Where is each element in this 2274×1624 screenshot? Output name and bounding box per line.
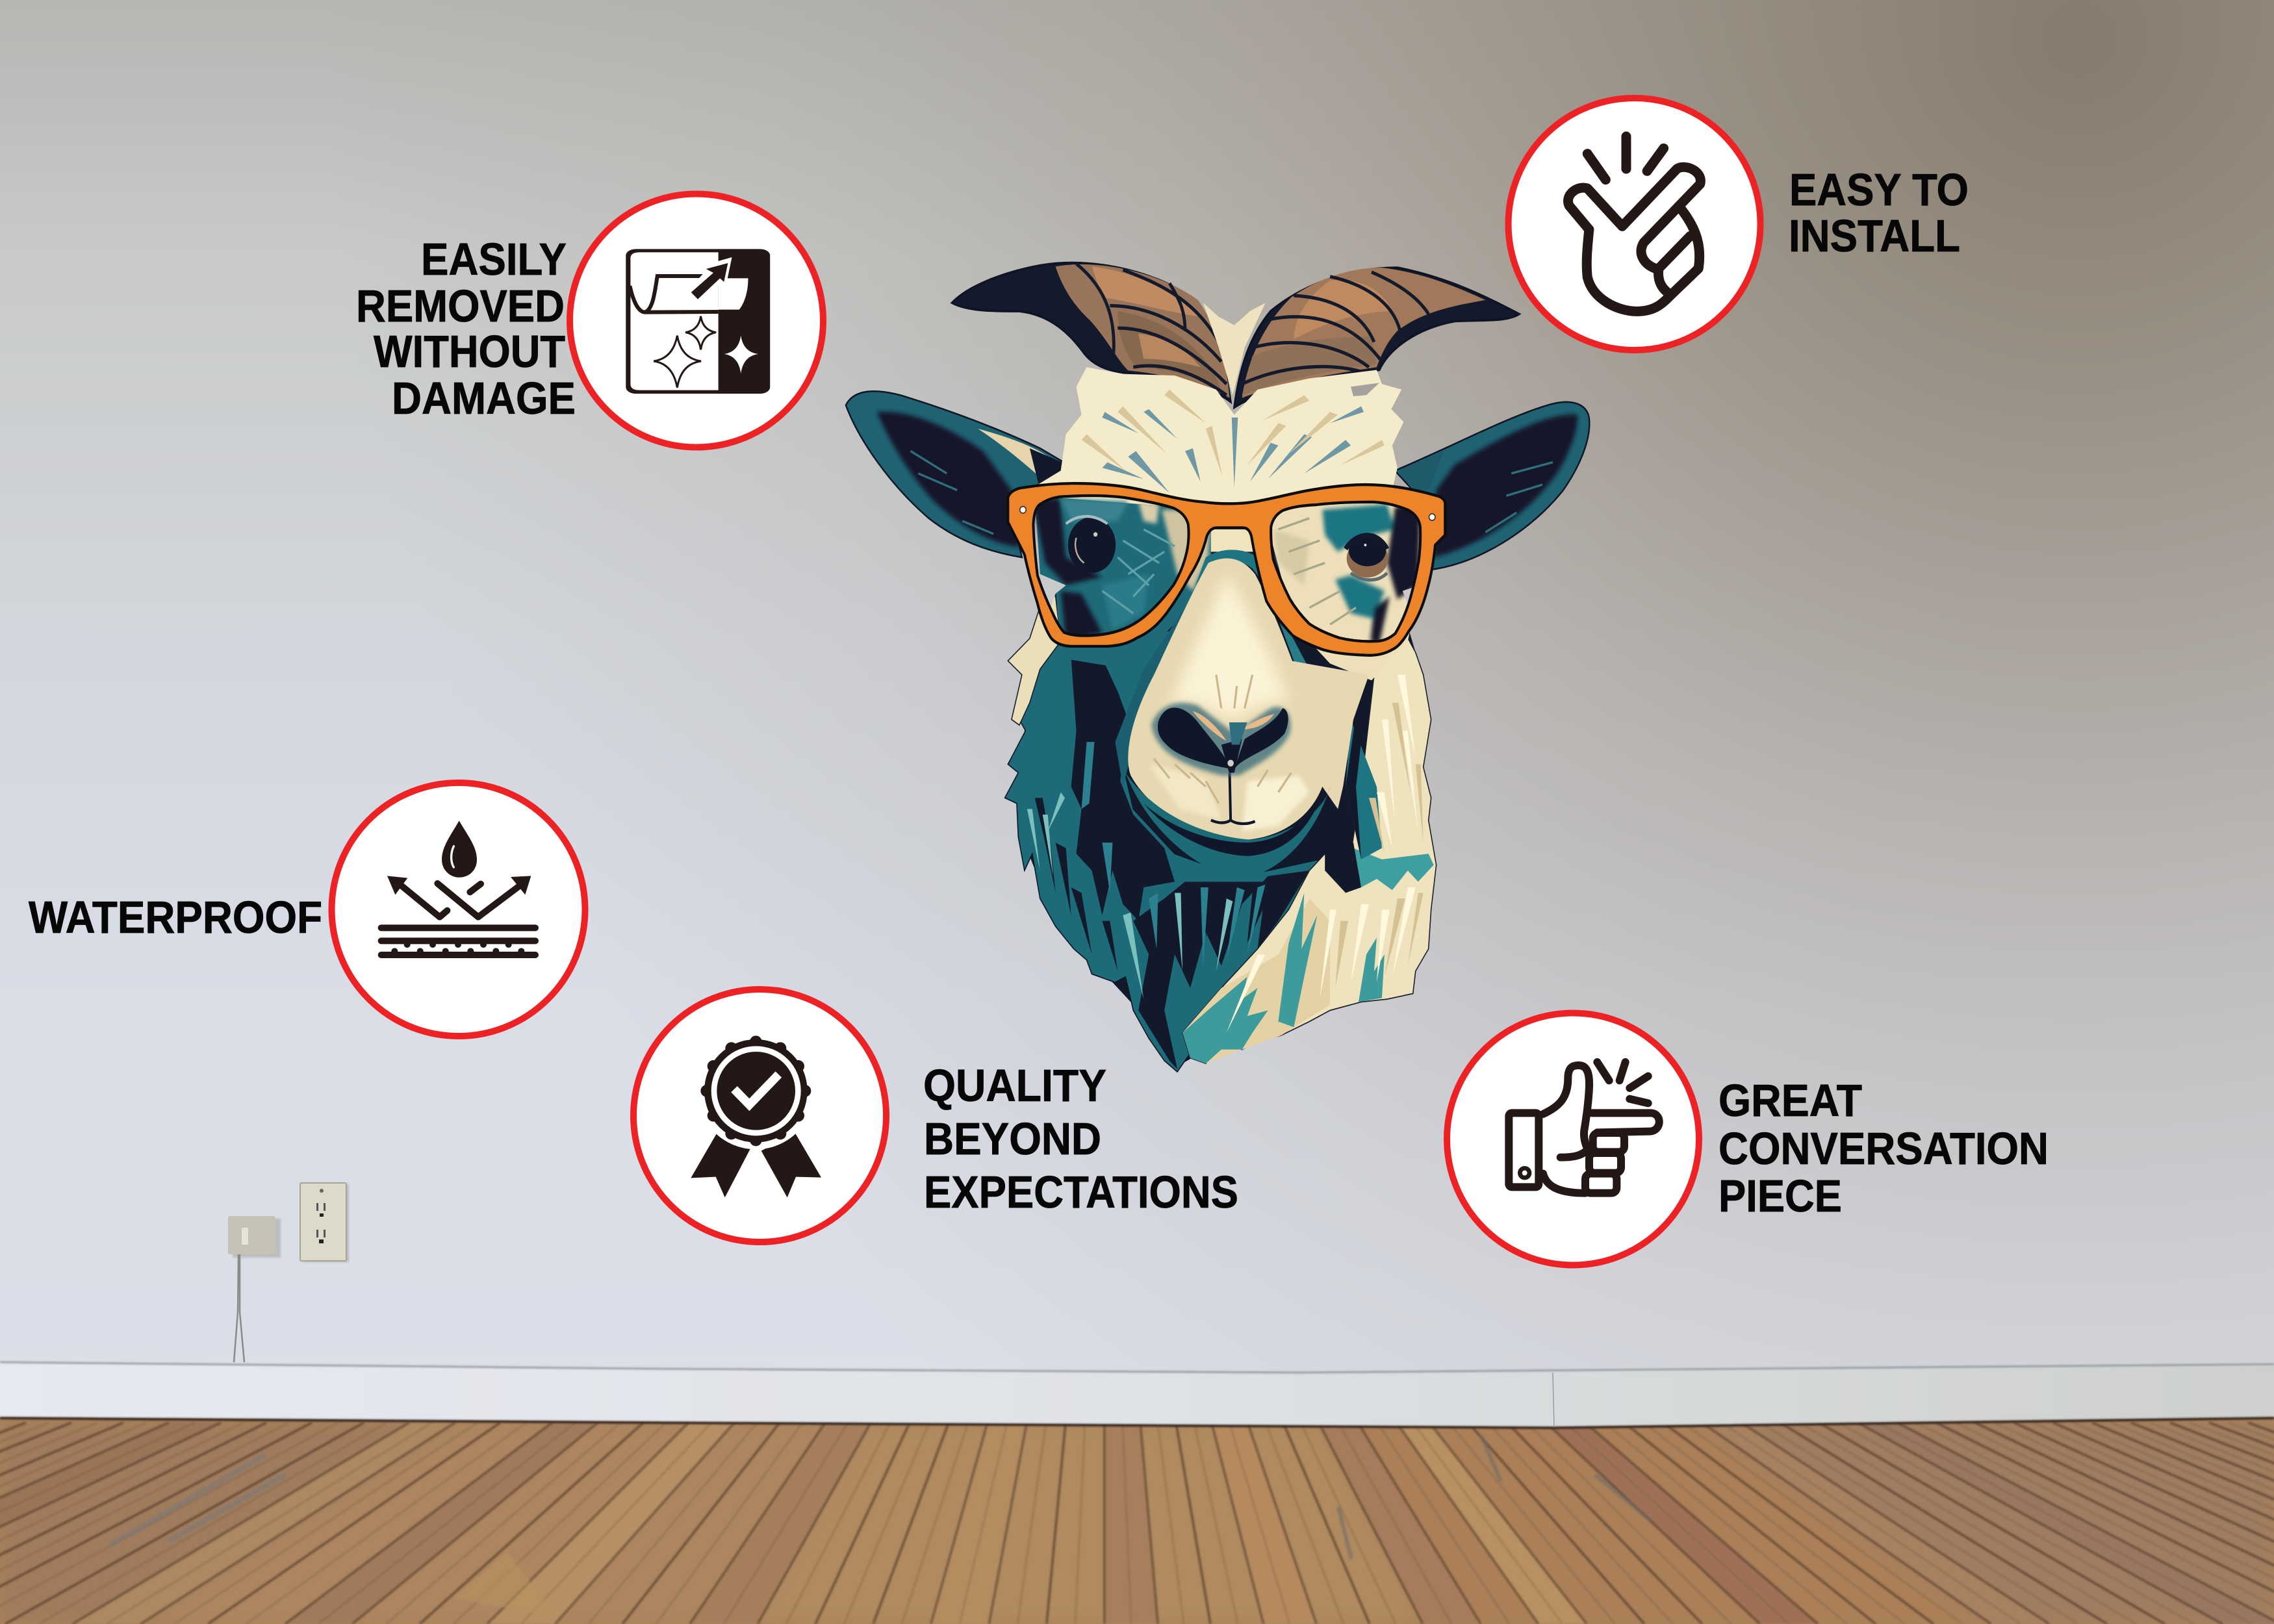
left horn [952, 262, 1231, 402]
label text: CONVERSATION [1718, 1123, 2049, 1174]
icon: award rosette [691, 1035, 821, 1198]
label text: DAMAGE [392, 373, 576, 424]
hair tuft between horns [1203, 303, 1266, 395]
head underlay [1022, 496, 1426, 1066]
label text: EASY TO [1789, 164, 1969, 215]
feature: easily removed without damage [356, 194, 823, 447]
label text: EXPECTATIONS [924, 1167, 1238, 1217]
eyes [1066, 516, 1388, 580]
badge circle [1509, 98, 1761, 350]
label text: PIECE [1718, 1171, 1842, 1221]
orange glasses [1008, 483, 1445, 655]
badge circle [331, 783, 585, 1036]
label text: WATERPROOF [29, 892, 322, 943]
label text: WITHOUT [374, 326, 565, 377]
label text: INSTALL [1789, 210, 1960, 261]
face behind lenses [1032, 496, 1421, 680]
icon: pointing thumbs-up hand [1505, 1058, 1663, 1197]
baseboard [0, 1362, 2274, 1428]
label text [923, 1060, 1238, 1217]
label text [1718, 1075, 2049, 1221]
wall switch and cord [228, 1216, 281, 1362]
mouth and chin [1125, 772, 1330, 879]
lower mane, right cream side [1182, 613, 1437, 1063]
label text: GREAT [1718, 1075, 1862, 1126]
left ear [846, 391, 1069, 557]
label text [356, 234, 576, 424]
feature: great conversation piece [1447, 1013, 2049, 1265]
badge circle [633, 989, 886, 1242]
icon: peeling sheet with sparkles [626, 249, 771, 394]
right horn [1234, 268, 1519, 407]
goat illustration [845, 261, 1591, 1073]
icon: water drop and layers [378, 820, 539, 958]
badge circle [1447, 1013, 1699, 1265]
feature: waterproof [29, 783, 585, 1036]
label text: BEYOND [924, 1113, 1101, 1164]
label text: QUALITY [923, 1060, 1106, 1111]
right ear [1395, 402, 1589, 570]
feature: quality beyond expectations [633, 989, 1238, 1242]
lower mane, left teal side [1005, 591, 1320, 1072]
label text: EASILY [421, 234, 567, 285]
label text [1789, 164, 1969, 261]
wood floor [0, 1397, 2274, 1624]
nose [1151, 703, 1290, 776]
wall outlet [300, 1183, 349, 1262]
feature: easy to install [1509, 98, 1969, 350]
badge circle [570, 194, 823, 447]
snout [1115, 559, 1369, 840]
label text: REMOVED [356, 281, 565, 331]
forehead wool [1019, 367, 1403, 513]
icon: finger snap hand [1563, 131, 1706, 316]
